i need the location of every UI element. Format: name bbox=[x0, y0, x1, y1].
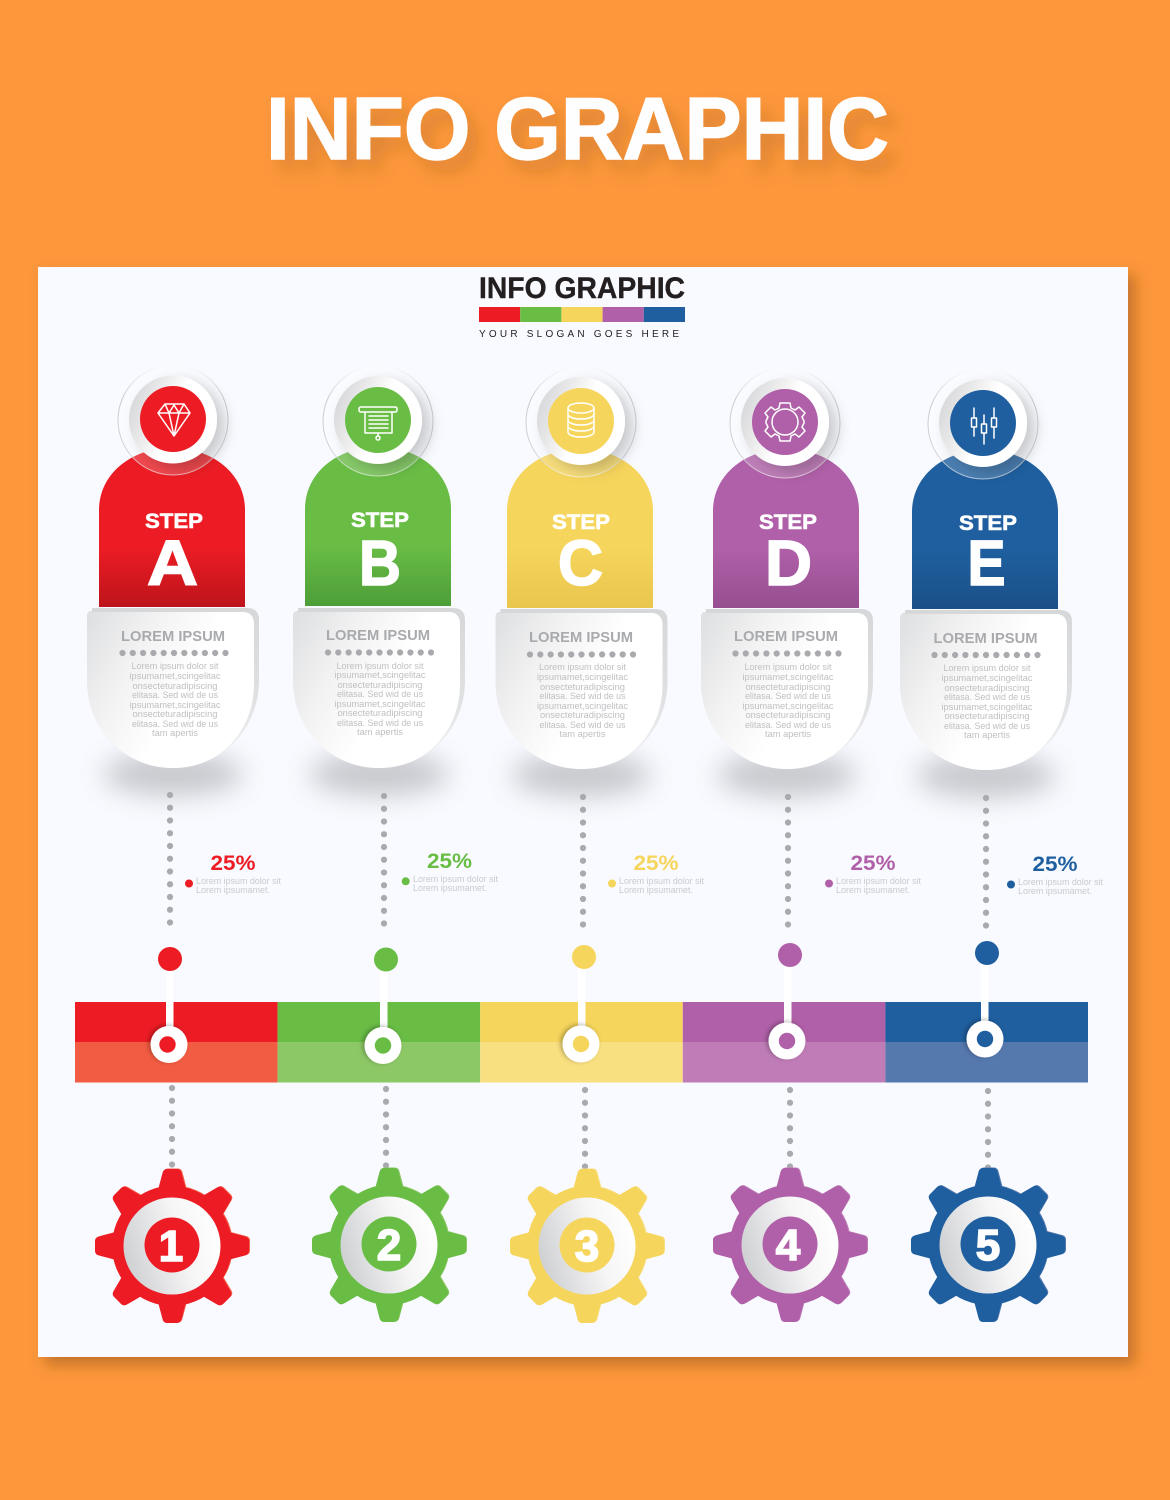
stat A: 25% bbox=[210, 852, 256, 875]
stat D: 25% bbox=[850, 852, 896, 875]
step E text card: onsecteturadipiscing bbox=[944, 682, 1030, 693]
step A label: STEP bbox=[145, 510, 203, 533]
step D label: D bbox=[765, 527, 812, 599]
step D label bbox=[759, 511, 817, 599]
timeline bar bbox=[75, 1002, 1088, 1082]
title: INFO GRAPHIC bbox=[266, 79, 889, 178]
step C text card: elitasa. Sed wid de us bbox=[540, 690, 626, 701]
step D text card: ipsumamet,scingelitac bbox=[742, 671, 834, 682]
step A tab bbox=[99, 448, 245, 607]
step E text card: LOREM IPSUM bbox=[934, 630, 1038, 647]
stat E bbox=[1007, 853, 1103, 896]
stat A bbox=[185, 852, 281, 895]
step D label: STEP bbox=[759, 511, 817, 534]
panel logo heading bbox=[479, 272, 685, 340]
timeline marker A bbox=[150, 947, 188, 1063]
step E card bbox=[900, 369, 1072, 798]
step A text card: tam apertis bbox=[152, 727, 198, 738]
stat E: Lorem ipsumamet. bbox=[1018, 886, 1092, 896]
panel logo heading: INFO GRAPHIC bbox=[479, 272, 685, 305]
step E text card: elitasa. Sed wid de us bbox=[944, 720, 1030, 731]
step B text card: onsecteturadipiscing bbox=[338, 679, 422, 690]
step C tab bbox=[507, 449, 653, 608]
step B label: STEP bbox=[351, 509, 409, 532]
step D text card: onsecteturadipiscing bbox=[746, 681, 830, 692]
step D icon badge bbox=[730, 368, 840, 478]
step B card bbox=[293, 366, 465, 796]
step E text card: Lorem ipsum dolor sit bbox=[944, 662, 1031, 673]
gear 4: 4 bbox=[776, 1221, 801, 1270]
stat D: Lorem ipsum dolor sit bbox=[836, 876, 921, 886]
step C text card: onsecteturadipiscing bbox=[540, 681, 625, 692]
step A text card: LOREM IPSUM bbox=[121, 628, 225, 645]
step E text card: onsecteturadipiscing bbox=[944, 710, 1030, 721]
step D text card: ipsumamet,scingelitac bbox=[742, 700, 834, 711]
step A text card: onsecteturadipiscing bbox=[132, 708, 218, 719]
step B label: B bbox=[359, 527, 401, 599]
step E label: STEP bbox=[959, 512, 1017, 535]
gear 4 bbox=[713, 1168, 868, 1322]
step A icon badge bbox=[118, 365, 228, 475]
stat D: Lorem ipsumamet. bbox=[836, 885, 910, 895]
step D text card: elitasa. Sed wid de us bbox=[745, 690, 831, 701]
step E text card: tam apertis bbox=[964, 729, 1010, 740]
panel: main white board bbox=[38, 267, 1128, 1357]
gear 5: 5 bbox=[976, 1221, 1000, 1270]
step C card bbox=[496, 367, 668, 797]
step C text card: elitasa. Sed wid de us bbox=[540, 719, 626, 730]
step D card bbox=[701, 368, 873, 797]
step D text card: tam apertis bbox=[765, 728, 811, 739]
stat C: Lorem ipsumamet. bbox=[619, 885, 693, 895]
step B text card: onsecteturadipiscing bbox=[338, 707, 422, 718]
step E text card bbox=[900, 610, 1072, 770]
lower dotted connectors bbox=[172, 1088, 988, 1169]
gear 3: 3 bbox=[575, 1222, 599, 1271]
timeline marker D bbox=[768, 943, 806, 1060]
step B text card: ipsumamet,scingelitac bbox=[334, 698, 426, 709]
stat C bbox=[608, 852, 704, 895]
upper dotted connectors bbox=[170, 795, 986, 929]
step B text card bbox=[293, 608, 465, 768]
stat A: Lorem ipsumamet. bbox=[196, 885, 270, 895]
step B text card: elitasa. Sed wid de us bbox=[337, 688, 423, 699]
step E label bbox=[959, 512, 1017, 599]
step C text card bbox=[496, 609, 668, 769]
step E text card: ipsumamet,scingelitac bbox=[942, 672, 1033, 683]
timeline marker E bbox=[966, 941, 1004, 1058]
stat C: Lorem ipsum dolor sit bbox=[619, 876, 704, 886]
step A label bbox=[145, 510, 203, 599]
step B text card: tam apertis bbox=[357, 726, 403, 737]
stat B: Lorem ipsum dolor sit bbox=[413, 874, 498, 884]
gear 5 bbox=[911, 1168, 1066, 1322]
step E label: E bbox=[968, 527, 1006, 599]
step C icon badge bbox=[526, 367, 636, 477]
stat B: Lorem ipsumamet. bbox=[413, 883, 487, 893]
stat C: 25% bbox=[634, 852, 679, 875]
step A text card: ipsumamet,scingelitac bbox=[130, 699, 221, 710]
step D tab bbox=[713, 449, 859, 608]
step E icon badge bbox=[928, 369, 1038, 479]
step C label: C bbox=[558, 527, 603, 599]
timeline marker C bbox=[562, 945, 600, 1062]
step B icon badge bbox=[323, 366, 433, 476]
stat A: Lorem ipsum dolor sit bbox=[196, 876, 281, 886]
gear 1 bbox=[95, 1168, 250, 1323]
timeline marker B bbox=[364, 948, 402, 1064]
step E text card: ipsumamet,scingelitac bbox=[942, 701, 1033, 712]
gear 1: 1 bbox=[159, 1222, 183, 1271]
step B tab bbox=[305, 447, 451, 606]
step B text card: LOREM IPSUM bbox=[326, 627, 430, 644]
step A card bbox=[87, 365, 259, 796]
step B text card: Lorem ipsum dolor sit bbox=[336, 660, 424, 671]
step D text card: Lorem ipsum dolor sit bbox=[744, 661, 832, 672]
step E text card: elitasa. Sed wid de us bbox=[944, 691, 1030, 702]
gear 2 bbox=[312, 1168, 467, 1322]
step C text card: ipsumamet,scingelitac bbox=[537, 671, 628, 682]
step B text card: ipsumamet,scingelitac bbox=[334, 669, 426, 680]
step E tab bbox=[912, 450, 1058, 609]
step A label: A bbox=[147, 527, 198, 599]
stat D bbox=[825, 852, 921, 895]
step B text card: elitasa. Sed wid de us bbox=[337, 717, 423, 728]
step C label: STEP bbox=[552, 511, 610, 534]
stat E: Lorem ipsum dolor sit bbox=[1018, 877, 1103, 887]
step A text card: onsecteturadipiscing bbox=[132, 680, 218, 691]
gear 3 bbox=[510, 1168, 665, 1323]
stat E: 25% bbox=[1032, 853, 1078, 876]
step D text card bbox=[701, 609, 873, 769]
step C text card: Lorem ipsum dolor sit bbox=[539, 661, 626, 672]
panel logo heading: YOUR SLOGAN GOES HERE bbox=[479, 329, 679, 340]
step D text card: onsecteturadipiscing bbox=[746, 709, 830, 720]
step B label bbox=[351, 509, 409, 599]
stat B: 25% bbox=[427, 850, 472, 873]
step C text card: LOREM IPSUM bbox=[529, 629, 633, 646]
step A text card: ipsumamet,scingelitac bbox=[130, 670, 221, 681]
step A text card: elitasa. Sed wid de us bbox=[132, 718, 218, 729]
step C text card: ipsumamet,scingelitac bbox=[537, 700, 628, 711]
gear 2: 2 bbox=[377, 1221, 401, 1270]
step C text card: tam apertis bbox=[560, 728, 606, 739]
step C label bbox=[552, 511, 610, 599]
stat B bbox=[402, 850, 498, 893]
step C text card: onsecteturadipiscing bbox=[540, 709, 625, 720]
step A text card: elitasa. Sed wid de us bbox=[132, 689, 218, 700]
step A text card bbox=[87, 608, 259, 768]
step D text card: elitasa. Sed wid de us bbox=[745, 719, 831, 730]
step D text card: LOREM IPSUM bbox=[734, 628, 838, 645]
step A text card: Lorem ipsum dolor sit bbox=[132, 660, 219, 671]
